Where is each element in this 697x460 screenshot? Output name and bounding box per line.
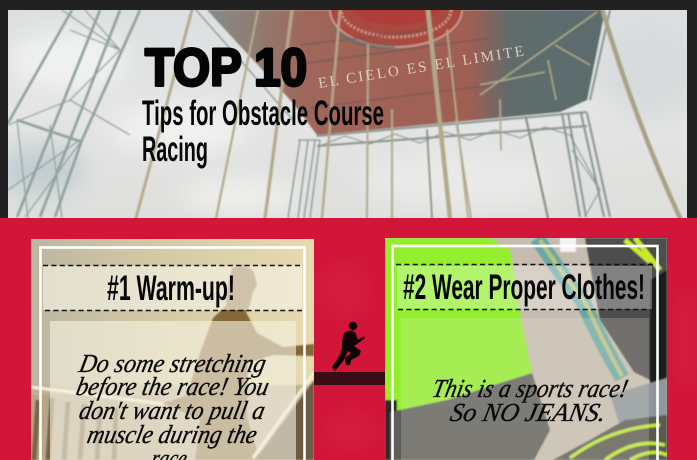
- body box: [50, 321, 296, 460]
- banner: [207, 10, 605, 135]
- truss centre and right: [196, 10, 610, 218]
- text block: tip 1: Do some stretching: [76, 349, 269, 378]
- photo: silhouette of stretching woman: [31, 266, 314, 460]
- panel: tip 1 warm-up: [31, 239, 314, 460]
- text block: tip 1: muscle during the: [85, 420, 260, 449]
- photo: green shirt and shoes: [385, 238, 667, 460]
- text block: tip 2: So NO JEANS.: [448, 398, 609, 427]
- heading: #1 Warm-up!: #1 Warm-up!: [107, 269, 235, 308]
- title band: [397, 266, 652, 309]
- ropes: [136, 10, 680, 218]
- text block: tip 2: [432, 378, 629, 422]
- panel: hero photo: EL CIELO ES EL LIMITE: [317, 44, 525, 92]
- connector bar: [314, 372, 385, 385]
- title: TOP 10: [145, 38, 307, 98]
- body box: [401, 318, 649, 460]
- text block: tip 1: [74, 349, 272, 460]
- text block: tip 1: before the race! You: [74, 372, 272, 401]
- text block: tip 2: This is a sports race!: [430, 374, 631, 403]
- white frame: [40, 248, 304, 460]
- title band: [43, 266, 302, 310]
- title: [142, 38, 384, 169]
- truss left: [8, 10, 140, 218]
- title: Tips for Obstacle Course: [142, 94, 384, 133]
- text block: tip 1: don't want to pull a: [77, 396, 268, 425]
- icon: running figure: [332, 322, 365, 371]
- panel: hero photo: [0, 0, 697, 218]
- panel: tip 2 proper clothes: [385, 238, 667, 460]
- red lower section background: [0, 218, 697, 460]
- white frame: [392, 246, 658, 460]
- dashed rules: [396, 264, 655, 310]
- title: Racing: [142, 130, 208, 169]
- dashed rules: [43, 266, 303, 310]
